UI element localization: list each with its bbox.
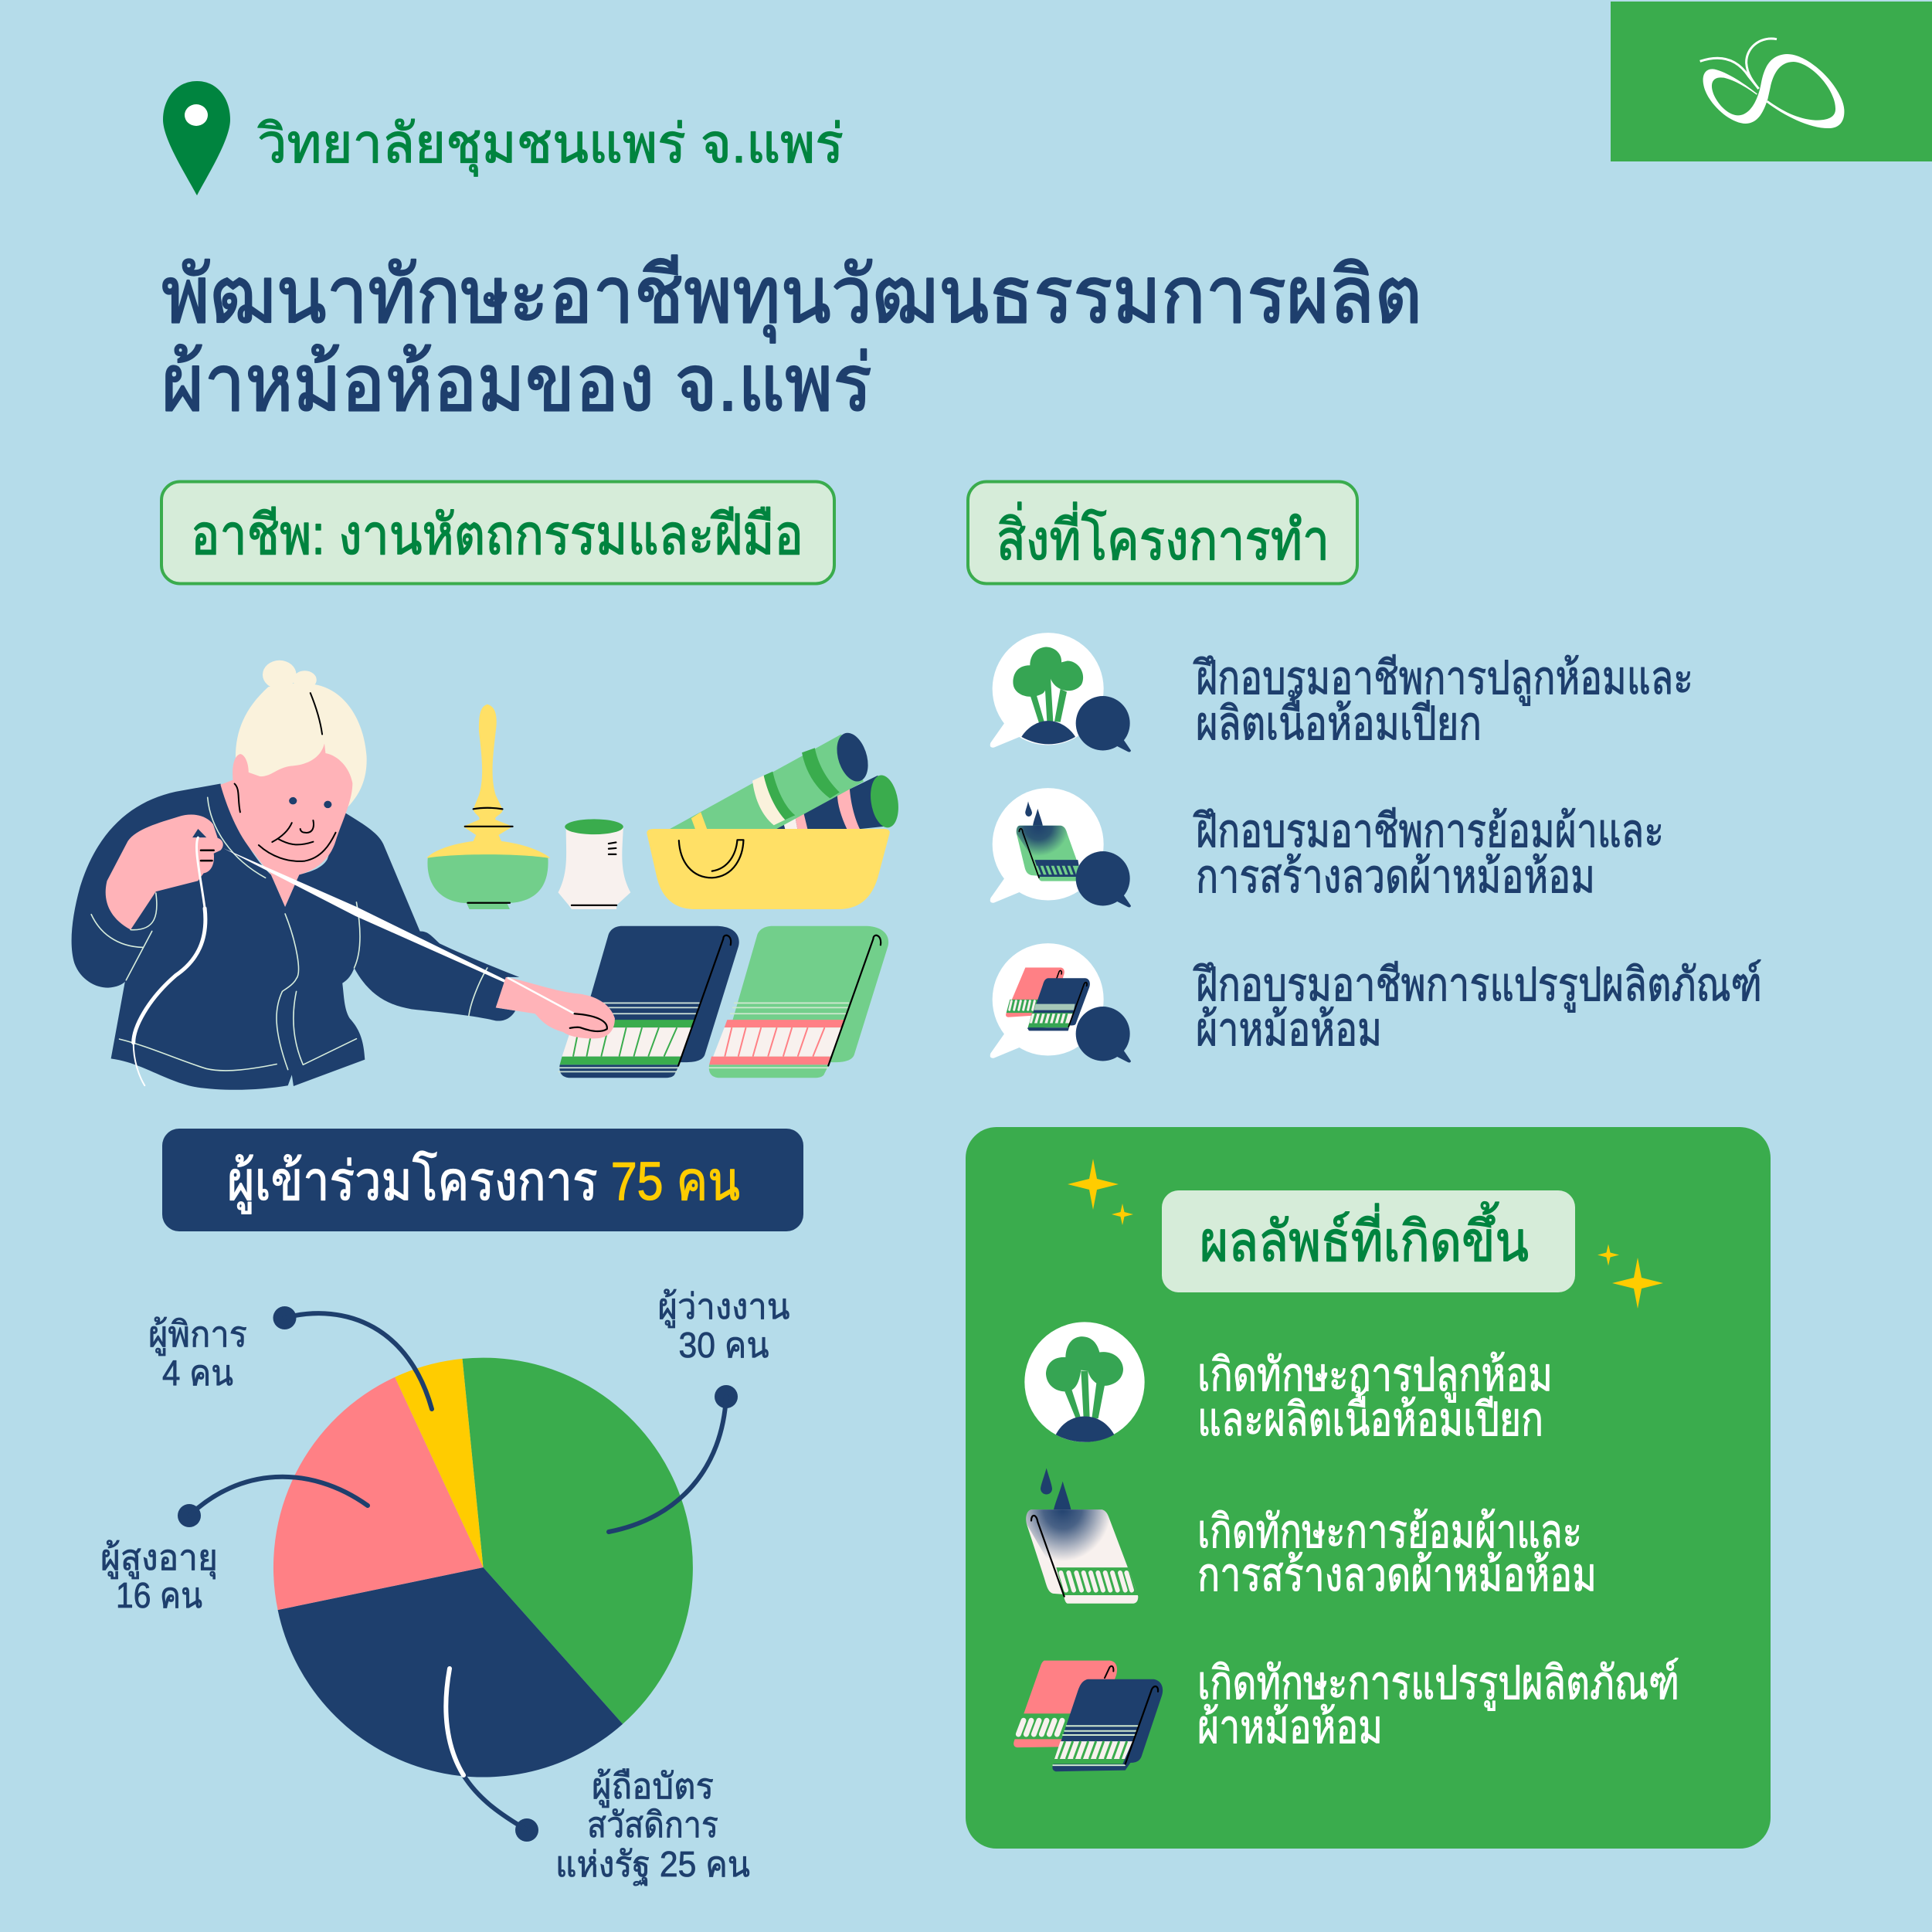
label: welfare card holders: แห่งรัฐ 25 คน (555, 1844, 750, 1886)
occupation label: อาชีพ: งานหัตถกรรมและฝีมือ (191, 504, 803, 566)
thread (134, 837, 575, 1085)
label: welfare card holders: สวัสดิการ (587, 1805, 718, 1845)
result 3 text: เกิดทักษะการแปรรูปผลิตภัณฑ์ (1197, 1657, 1679, 1711)
label: elderly (100, 1537, 218, 1615)
result 2 icon: dyed cloth (1026, 1469, 1138, 1604)
folded fabrics (1006, 968, 1090, 1031)
label: unemployed: 30 คน (678, 1325, 769, 1365)
hair (236, 660, 367, 810)
activity 2 text: การสร้างลวดผ้าหม้อห้อม (1196, 851, 1595, 902)
sparkles left (1068, 1159, 1133, 1225)
label: disabled (148, 1314, 247, 1393)
label: disabled: 4 คน (162, 1353, 233, 1393)
results heading (1162, 1190, 1575, 1292)
label: unemployed (658, 1286, 789, 1365)
panel: results (966, 1127, 1771, 1849)
participants banner: ผู้เข้าร่วมโครงการ 75 คน (227, 1150, 740, 1214)
lamp with green bowl (426, 705, 550, 909)
activity 2 text (1193, 805, 1664, 902)
project activities label (968, 482, 1357, 584)
result 1 icon: indigo plant (1024, 1322, 1145, 1442)
activity 1 text: ฝึกอบรมอาชีพการปลูกห้อมและ (1193, 652, 1693, 706)
result 2 text (1197, 1506, 1597, 1601)
participants banner (162, 1129, 803, 1231)
leader: disabled (273, 1306, 432, 1409)
activity 3 text (1193, 959, 1762, 1055)
dyed cloth (1017, 801, 1079, 881)
occupation label (161, 482, 834, 584)
college name: วิทยาลัยชุมชนแพร่ จ.แพร่ (257, 114, 844, 177)
yellow basket (647, 829, 890, 909)
title: ผ้าหม้อห้อมของ จ.แพร่ (161, 339, 872, 427)
result 1 text: เกิดทักษะการปลูกห้อม (1197, 1349, 1553, 1403)
label: elderly: 16 คน (116, 1575, 202, 1615)
facial features (235, 693, 336, 861)
left hand (106, 815, 223, 930)
pie chart (273, 1358, 693, 1778)
result 2 text: เกิดทักษะการย้อมผ้าและ (1197, 1506, 1582, 1557)
leader: elderly (178, 1477, 368, 1527)
label: elderly: ผู้สูงอายุ (100, 1537, 218, 1580)
activity 3 text: ฝึกอบรมอาชีพการแปรรูปผลิตภัณฑ์ (1193, 959, 1762, 1013)
label: disabled: ผู้พิการ (148, 1314, 247, 1356)
face and neck (220, 743, 352, 907)
result 1 text (1197, 1349, 1553, 1445)
label: welfare card holders (555, 1766, 750, 1886)
result 3 text: ผ้าหม้อห้อม (1197, 1701, 1383, 1753)
activity 1: speech bubble icon (990, 633, 1131, 752)
navy folded fabric (559, 926, 739, 1078)
jacket (72, 784, 519, 1090)
result 3 text (1197, 1657, 1679, 1753)
activity 3 text: ผ้าหม้อห้อม (1196, 1003, 1382, 1055)
title: พัฒนาทักษะอาชีพทุนวัฒนธรรมการผลิต (161, 251, 1422, 343)
project activities label: สิ่งที่โครงการทำ (997, 502, 1329, 572)
right hand (496, 977, 615, 1038)
icon: location pin (163, 81, 230, 195)
rolled fabrics (670, 732, 901, 829)
logo panel (1611, 2, 1932, 161)
activity 2 text: ฝึกอบรมอาชีพการย้อมผ้าและ (1193, 805, 1664, 857)
tree (1013, 647, 1083, 744)
activity 1 text: ผลิตเนื้อห้อมเปียก (1196, 690, 1482, 749)
activity 1 text (1193, 652, 1693, 749)
green folded fabric (709, 926, 888, 1078)
white cup (558, 819, 630, 909)
activity 2: speech bubble icon (990, 788, 1131, 907)
icon: butterfly infinity logo (1700, 39, 1844, 128)
result 2 text: การสร้างลวดผ้าหม้อห้อม (1197, 1549, 1597, 1601)
leader: welfare card holders (446, 1669, 538, 1842)
illustration: elderly woman with indigo crafts (72, 660, 901, 1090)
results heading: ผลลัพธ์ที่เกิดขึ้น (1200, 1201, 1529, 1273)
activity 3: speech bubble icon (990, 943, 1131, 1062)
sparkles right (1598, 1244, 1663, 1309)
jacket seam lines (91, 797, 487, 1071)
leader: unemployed (609, 1385, 738, 1532)
result 3 icon: folded fabrics (1014, 1661, 1163, 1771)
label: welfare card holders: ผู้ถือบัตร (592, 1766, 714, 1808)
label: unemployed: ผู้ว่างงาน (658, 1286, 789, 1328)
result 1 text: และผลิตเนื้อห้อมเปียก (1197, 1386, 1543, 1445)
title (161, 251, 1422, 427)
